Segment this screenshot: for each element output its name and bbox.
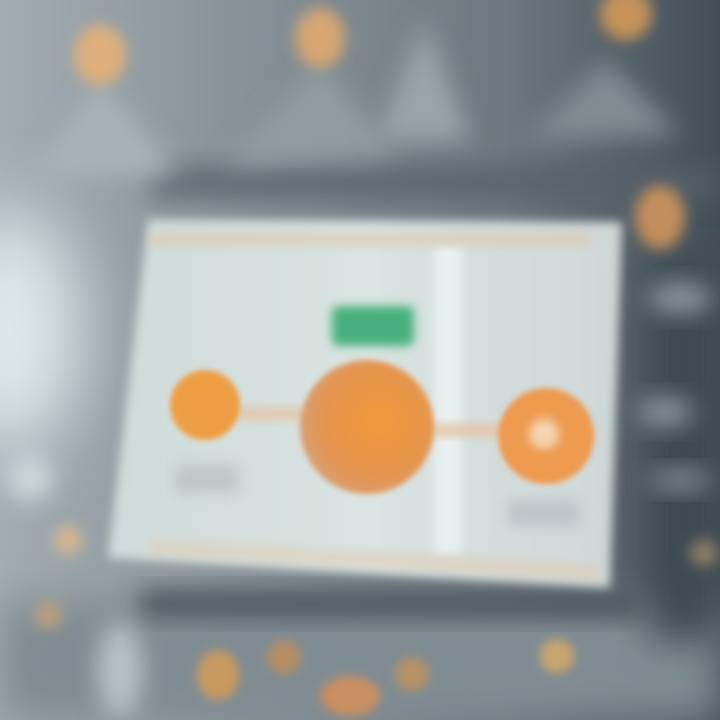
icon: orange bulb right — [600, 0, 652, 40]
text block left — [174, 464, 240, 494]
connector left — [238, 408, 304, 420]
top background cones with orange bulbs — [30, 0, 685, 249]
connector right — [432, 424, 502, 436]
panel: main card — [108, 220, 622, 588]
circle left — [170, 370, 240, 440]
heading strip — [150, 232, 590, 246]
icon: orange bulb side — [635, 185, 685, 249]
icon: orange bulb left — [74, 25, 126, 85]
circle right — [498, 388, 594, 484]
icon: orange bulb centre — [295, 8, 345, 68]
circle centre — [300, 360, 434, 494]
scattered orange dots — [34, 526, 718, 716]
text block right — [507, 500, 579, 526]
footer strip — [150, 540, 600, 580]
green label — [332, 306, 414, 346]
